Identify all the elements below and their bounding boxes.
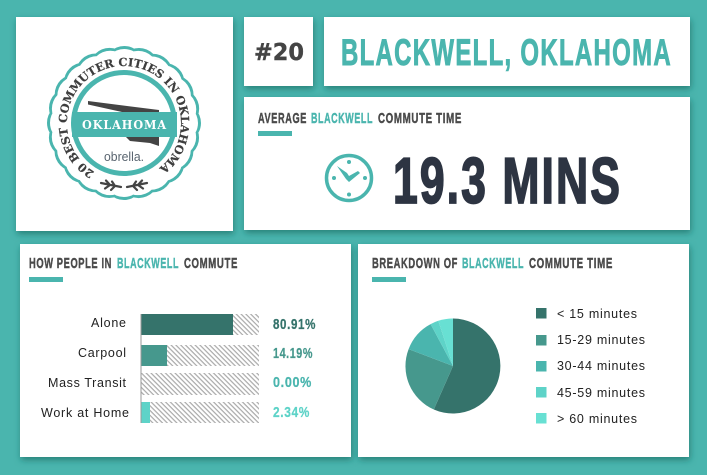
heading: average commute: COMMUTE TIME <box>378 110 462 127</box>
bar chart: 0.00% <box>273 374 312 391</box>
bar chart: Mass Transit <box>48 376 127 390</box>
legend: 15-29 minutes <box>557 333 645 347</box>
badge logo: obrella. <box>104 149 144 164</box>
bar chart: 14.19% <box>273 345 313 362</box>
legend: 30-44 minutes <box>557 359 645 373</box>
heading: how people commute: COMMUTE <box>184 255 238 272</box>
bar chart: 80.91% <box>273 316 316 333</box>
panel: city title <box>324 17 690 86</box>
icon: scalloped badge <box>47 46 201 200</box>
heading: breakdown: COMMUTE TIME <box>529 255 613 272</box>
legend <box>536 307 645 426</box>
icon: clock <box>326 156 372 200</box>
heading: breakdown <box>372 255 613 272</box>
heading: breakdown: BREAKDOWN OF <box>372 255 458 272</box>
legend: < 15 minutes <box>557 307 637 321</box>
panel: rank <box>244 17 313 86</box>
heading: average commute: AVERAGE <box>258 110 307 127</box>
legend: 45-59 minutes <box>557 386 645 400</box>
bar chart: Carpool <box>78 346 126 360</box>
bar chart: Work at Home <box>41 406 129 420</box>
heading: breakdown: BLACKWELL <box>462 255 524 272</box>
panel: average commute time <box>244 97 690 230</box>
badge state name: OKLAHOMA <box>82 117 167 132</box>
rank number: #20 <box>254 40 304 66</box>
bar chart <box>41 314 316 423</box>
heading: how people commute <box>29 255 238 272</box>
heading: how people commute: HOW PEOPLE IN <box>29 255 112 272</box>
heading: average commute <box>258 110 462 127</box>
panel: badge <box>14 16 238 238</box>
pie chart <box>405 318 500 413</box>
panel: how people commute <box>20 244 351 457</box>
heading: how people commute: BLACKWELL <box>117 255 179 272</box>
heading: average commute: BLACKWELL <box>311 110 373 127</box>
badge curved title: 20 BEST COMMUTER CITIES IN OKLAHOMA <box>58 58 190 178</box>
icon: Oklahoma state silhouette <box>88 101 159 146</box>
bar chart: Alone <box>91 316 126 330</box>
panel: commute time breakdown <box>358 244 689 457</box>
legend: > 60 minutes <box>557 412 637 426</box>
icon: laurel <box>101 180 147 190</box>
bar chart: 2.34% <box>273 404 310 421</box>
